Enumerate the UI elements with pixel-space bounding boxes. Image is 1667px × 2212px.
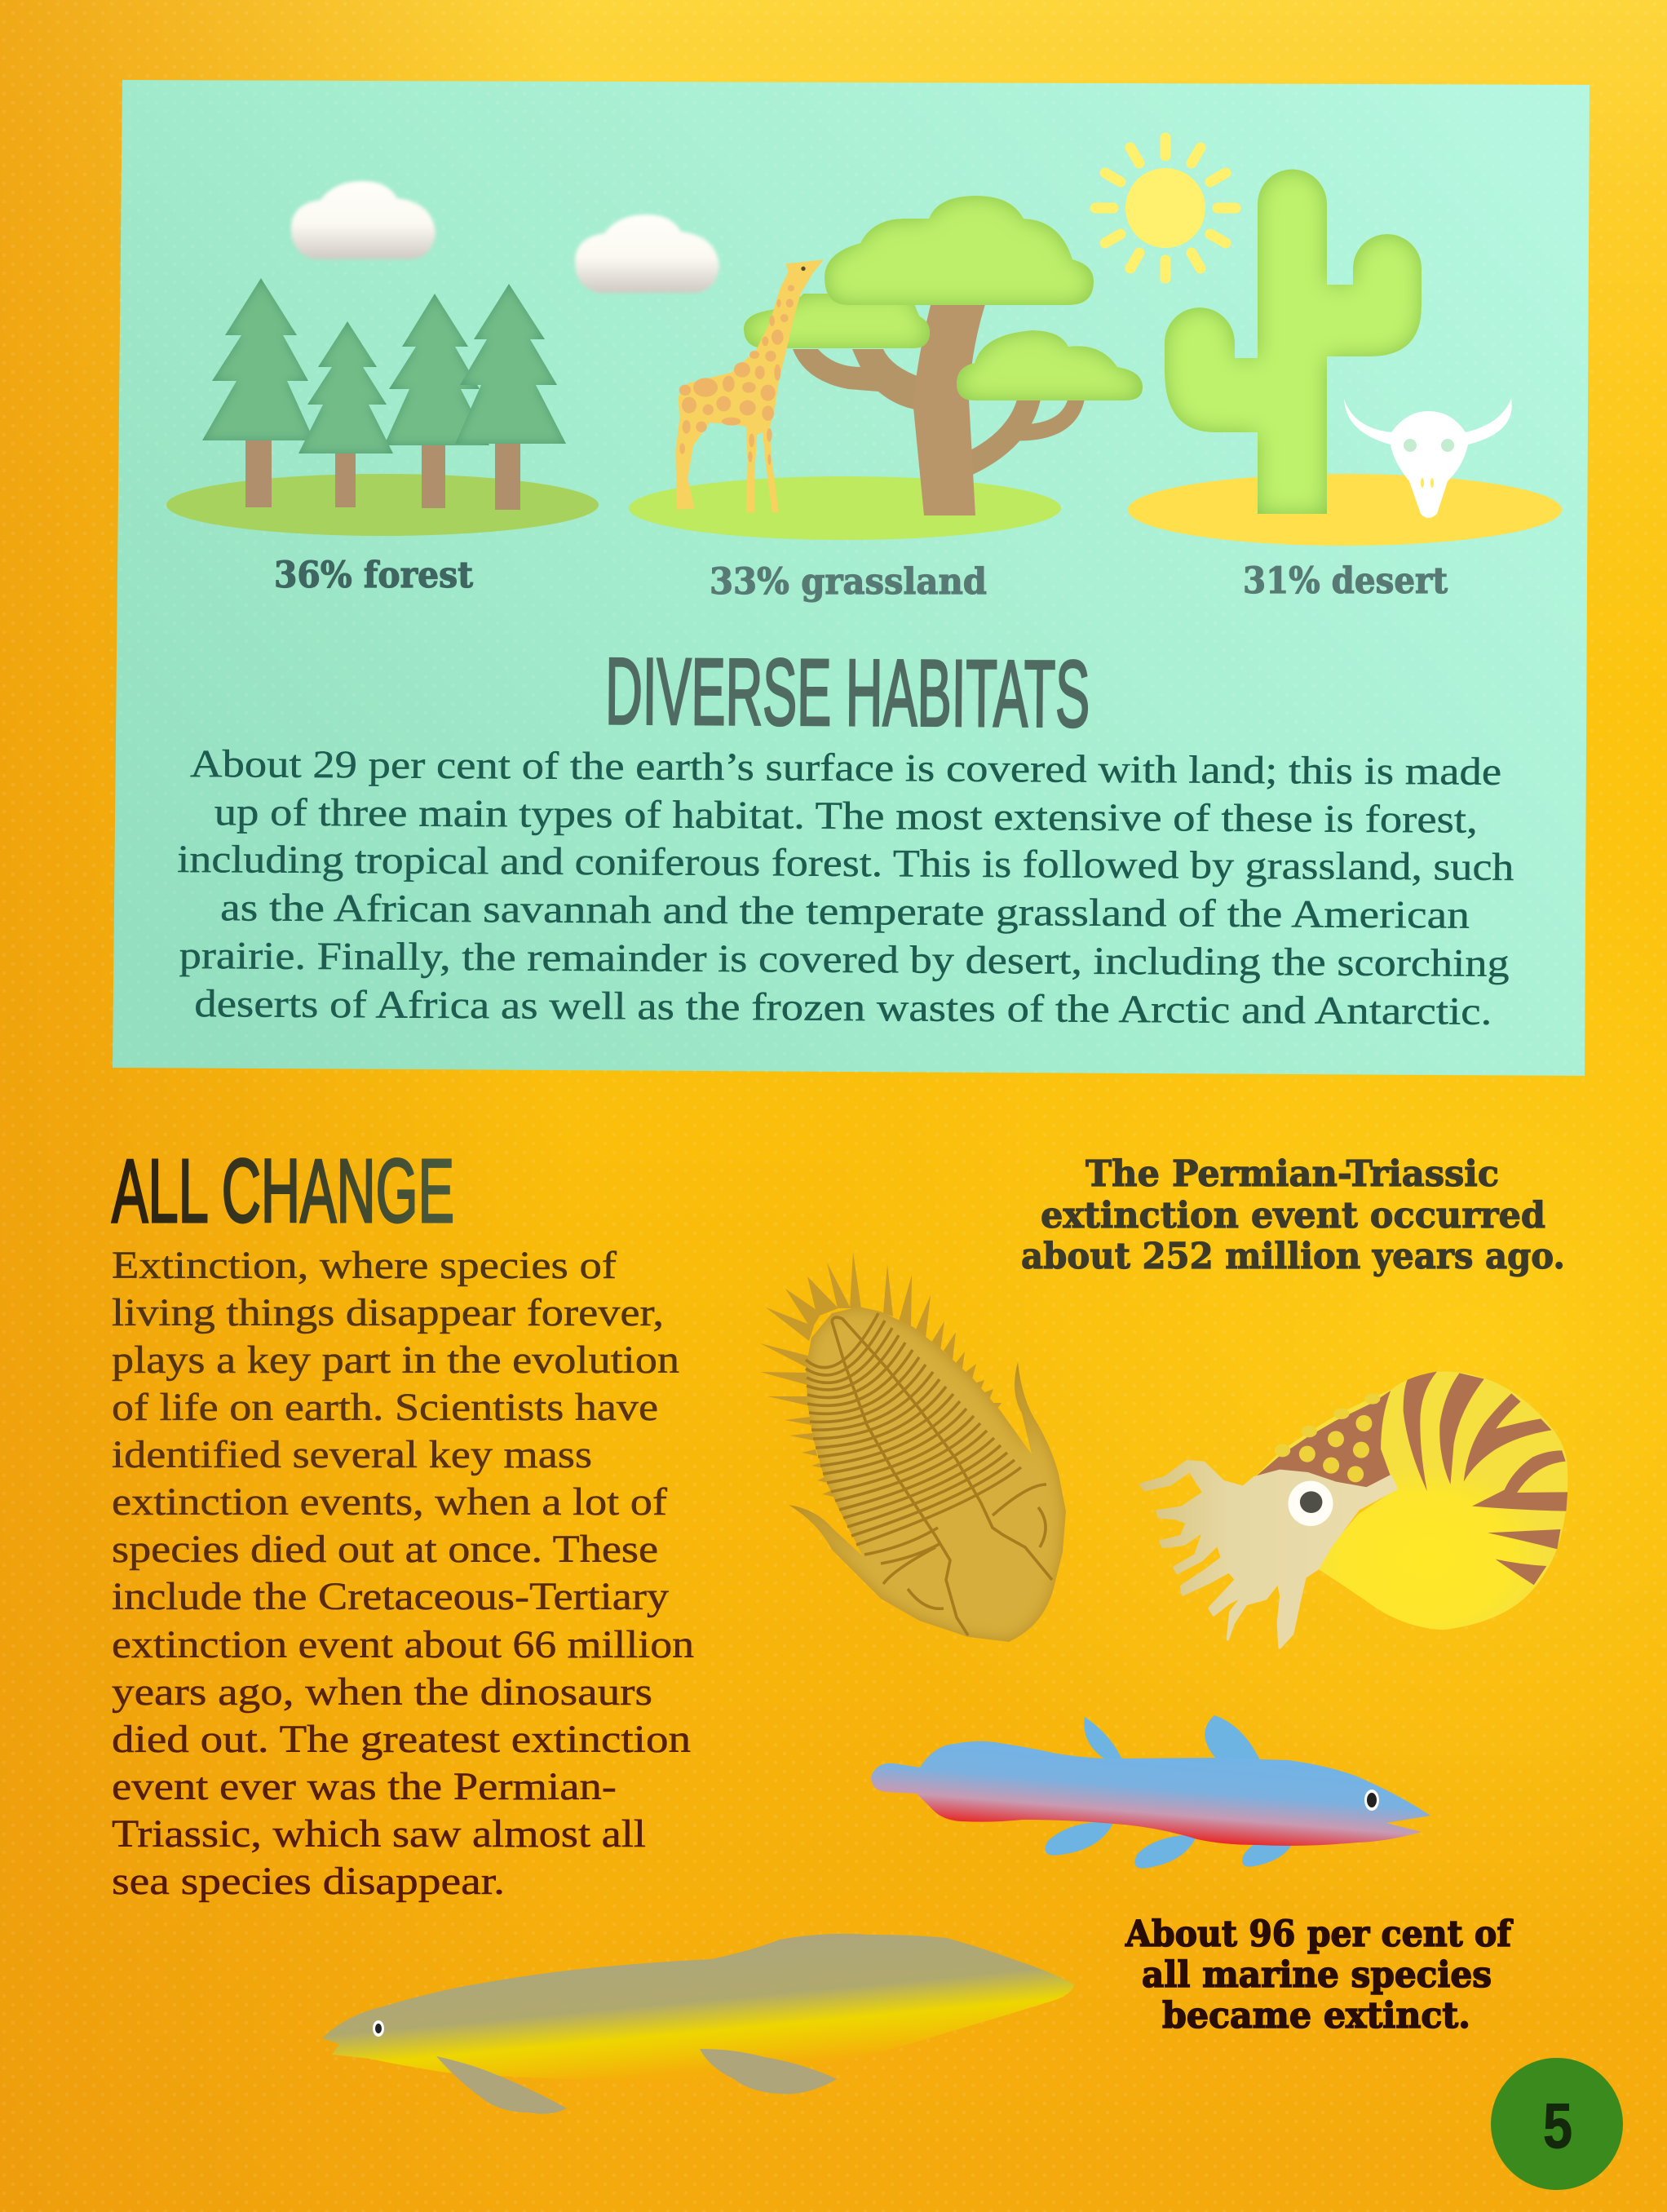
callout: marine species extinct — [1125, 1913, 1514, 2037]
stripes — [1404, 1372, 1568, 1585]
desert illustration — [1095, 138, 1562, 546]
forest illustration — [166, 278, 599, 536]
eye — [1288, 1481, 1333, 1526]
icon: cactus — [1165, 170, 1422, 514]
hood — [1254, 1391, 1391, 1489]
text block: habitats paragraph: including tropical and coniferous forest. This is followed by grassland, such — [177, 838, 1514, 889]
text block: extinction paragraph: extinction event about 66 million — [112, 1623, 694, 1666]
illustration: grey and yellow fish — [322, 1934, 1074, 2114]
callout: marine species extinct: all marine species — [1142, 1954, 1492, 1996]
text block: habitats paragraph: deserts of Africa as well as the frozen wastes of the Arctic and Antarctic. — [194, 982, 1492, 1033]
shell — [1254, 1371, 1568, 1630]
label: 36% forest: 36% forest — [274, 555, 474, 596]
text block: habitats paragraph: About 29 per cent of the earth’s surface is covered with land; this is made — [190, 742, 1501, 794]
text block: extinction paragraph: species died out at once. These — [112, 1528, 658, 1571]
cloud right — [575, 215, 719, 293]
callout: marine species extinct: became extinct. — [1162, 1995, 1470, 2037]
acacia tree — [744, 196, 1143, 515]
illustration: nautilus — [1141, 1371, 1568, 1650]
illustration: trilobite — [760, 1252, 1066, 1642]
text block: extinction paragraph: event ever was the Permian- — [112, 1765, 617, 1808]
callout: marine species extinct: About 96 per cent of — [1125, 1913, 1514, 1955]
grassland illustration — [629, 196, 1143, 540]
callout: permian-triassic date: extinction event occurred — [1041, 1195, 1545, 1237]
page number badge: 5 — [1543, 2090, 1572, 2161]
label: 33% grassland: 33% grassland — [710, 561, 987, 603]
text block: extinction paragraph: of life on earth. Scientists have — [112, 1386, 658, 1429]
text block: extinction paragraph: plays a key part in the evolution — [112, 1338, 679, 1382]
heading: all change: ALL CHANGE — [112, 1141, 454, 1241]
icon: sun — [1095, 138, 1236, 278]
body and tentacles — [1141, 1462, 1396, 1648]
label: 31% desert: 31% desert — [1243, 560, 1448, 602]
illustration: blue and red fish — [871, 1715, 1430, 1869]
text block: extinction paragraph: Triassic, which saw almost all — [112, 1812, 646, 1856]
text block: extinction paragraph: sea species disappear. — [112, 1860, 505, 1903]
cloud left — [291, 181, 436, 259]
giraffe — [675, 259, 824, 512]
text block: extinction paragraph: Extinction, where species of — [112, 1244, 617, 1287]
text block: habitats paragraph — [176, 742, 1514, 1033]
text block: extinction paragraph: identified several key mass — [112, 1433, 592, 1476]
text block: habitats paragraph: prairie. Finally, the remainder is covered by desert, including the scorching — [179, 934, 1510, 985]
text block: habitats paragraph: as the African savannah and the temperate grassland of the American — [220, 886, 1470, 937]
text block: extinction paragraph — [112, 1244, 694, 1903]
callout: permian-triassic date: The Permian-Triassic — [1086, 1153, 1499, 1195]
panel: diverse habitats — [113, 80, 1590, 1076]
shell core — [1320, 1476, 1535, 1630]
text block: extinction paragraph: died out. The greatest extinction — [112, 1718, 691, 1761]
heading: diverse habitats: DIVERSE HABITATS — [605, 638, 1090, 747]
text block: extinction paragraph: extinction events, when a lot of — [112, 1480, 667, 1524]
callout: permian-triassic date: about 252 million years ago. — [1021, 1236, 1565, 1277]
icon: cow skull — [1344, 399, 1512, 518]
page number badge — [1491, 2058, 1623, 2190]
callout: permian-triassic date — [1021, 1153, 1565, 1277]
text block: habitats paragraph: up of three main types of habitat. The most extensive of these is forest, — [214, 790, 1478, 842]
text block: extinction paragraph: living things disappear forever, — [112, 1291, 664, 1334]
text block: extinction paragraph: years ago, when the dinosaurs — [112, 1670, 652, 1714]
text block: extinction paragraph: include the Cretaceous-Tertiary — [112, 1575, 669, 1618]
